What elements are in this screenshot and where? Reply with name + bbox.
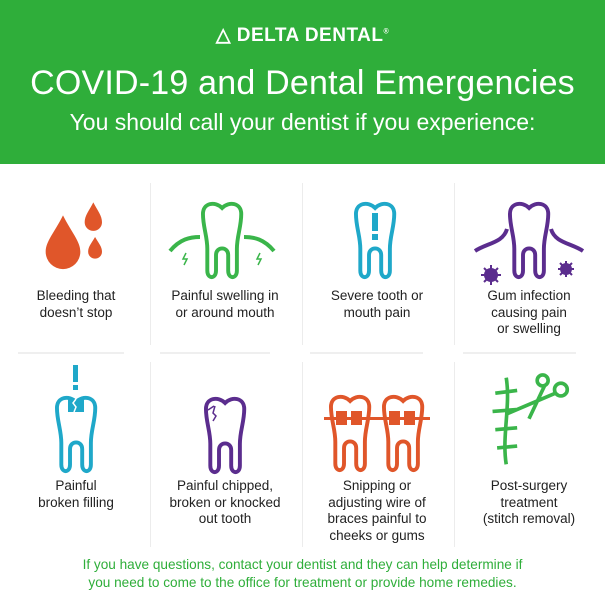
caption: out tooth	[199, 511, 251, 526]
icon: stitches and scissors	[492, 373, 570, 465]
caption: treatment	[500, 494, 558, 510]
caption: Gum infection	[487, 288, 571, 303]
icon: tooth pain	[354, 202, 396, 280]
icon: blood drops	[46, 202, 102, 270]
caption	[331, 288, 423, 320]
icon: braces	[324, 394, 430, 472]
caption row1: doesn’t stop	[40, 304, 112, 320]
caption: cheeks or gums	[329, 528, 425, 542]
caption: Snipping or	[343, 478, 411, 493]
caption: Painful chipped,	[177, 478, 273, 493]
caption: or swelling	[497, 321, 561, 336]
caption row2	[38, 478, 114, 510]
caption: Post-surgery	[491, 478, 567, 493]
footer text: If you have questions, contact your dentist and they can help determine if	[83, 557, 522, 572]
caption: (stitch removal)	[483, 511, 575, 526]
logo: △ DELTA DENTAL®	[216, 25, 389, 46]
caption: mouth pain	[344, 304, 410, 320]
icon: broken filling	[55, 365, 98, 474]
caption row2: Painful	[55, 478, 97, 493]
icon: chipped tooth	[204, 396, 246, 474]
caption: Painful swelling in	[171, 288, 279, 303]
header	[0, 0, 605, 164]
caption row2: broken filling	[38, 494, 114, 510]
caption	[169, 478, 281, 526]
subtitle: You should call your dentist if you experience:	[70, 109, 535, 135]
caption: adjusting wire of	[328, 494, 426, 510]
icon: swollen tooth	[168, 202, 276, 280]
caption: broken or knocked	[169, 494, 281, 510]
caption	[487, 288, 571, 336]
caption	[327, 478, 427, 543]
caption: Severe tooth or	[331, 288, 423, 303]
title: COVID-19 and Dental Emergencies	[30, 64, 575, 102]
caption row1	[37, 288, 116, 320]
icon: gum infection	[474, 202, 584, 285]
caption: braces painful to	[327, 511, 427, 526]
caption	[171, 288, 279, 320]
footer text	[83, 557, 522, 590]
caption: causing pain	[491, 304, 567, 320]
footer text: you need to come to the office for treatment or provide home remedies.	[88, 575, 517, 590]
caption	[483, 478, 575, 526]
caption: or around mouth	[175, 304, 275, 320]
caption row1: Bleeding that	[37, 288, 115, 303]
